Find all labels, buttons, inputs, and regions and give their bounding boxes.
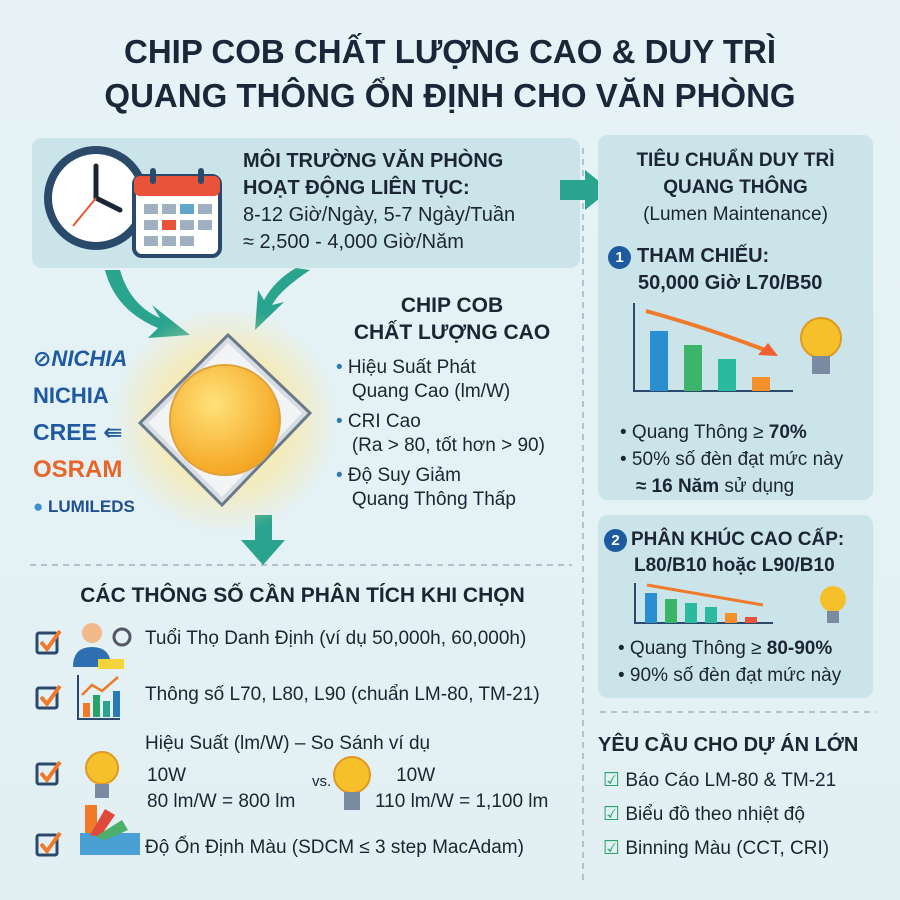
heading: (Lumen Maintenance) (643, 204, 828, 225)
list: parameters: Độ Ổn Định Màu (SDCM ≤ 3 step MacAdam) (145, 837, 524, 858)
list: chip features: (Ra > 80, tốt hơn > 90) (352, 435, 545, 456)
list: parameters: 110 lm/W = 1,100 lm (375, 791, 548, 812)
panel: premium segment: L80/B10 hoặc L90/B10 (634, 555, 835, 576)
person icon (82, 623, 102, 643)
icon: clock and calendar (44, 146, 222, 258)
bulb icon (86, 752, 118, 784)
list: chip features: • Hiệu Suất Phát (336, 357, 476, 378)
chart 1 (633, 303, 842, 392)
brand logos: ● LUMILEDS (33, 497, 135, 516)
heading: QUANG THÔNG (663, 177, 808, 198)
list: requirements: ☑ Biểu đồ theo nhiệt độ (603, 804, 805, 825)
list: requirements (603, 770, 836, 859)
icons: checkboxes (36, 623, 140, 856)
text: office hours: ≈ 2,500 - 4,000 Giờ/Năm (243, 231, 464, 253)
list: parameters: 10W (396, 765, 435, 786)
title (104, 33, 796, 114)
list: parameters: 80 lm/W = 800 lm (147, 791, 295, 812)
list: requirements: ☑ Binning Màu (CCT, CRI) (603, 838, 829, 859)
heading: TIÊU CHUẨN DUY TRÌ (636, 150, 835, 171)
list: parameters: vs. (312, 773, 331, 790)
text: office hours (243, 148, 515, 253)
subheading 1: 1 (615, 249, 624, 266)
panel: lumen maintenance (598, 135, 873, 500)
text: office hours: HOẠT ĐỘNG LIÊN TỤC: (243, 177, 470, 199)
title: CHIP COB CHẤT LƯỢNG CAO & DUY TRÌ (124, 33, 776, 70)
icon: COB chip (116, 314, 332, 526)
panel: premium segment (598, 515, 873, 698)
panel: premium segment: 2 (611, 532, 620, 549)
list: chip features: • CRI Cao (336, 411, 421, 432)
heading: chip cob (354, 294, 550, 344)
subheading 1: 50,000 Giờ L70/B50 (638, 272, 822, 294)
list: parameters (36, 623, 548, 858)
brand logos: ⊘NICHIA (33, 346, 127, 371)
heading (636, 148, 835, 225)
text: office hours: 8-12 Giờ/Ngày, 5-7 Ngày/Tuần (243, 204, 515, 226)
panel: premium segment: PHÂN KHÚC CAO CẤP: (631, 529, 844, 550)
title: QUANG THÔNG ỔN ĐỊNH CHO VĂN PHÒNG (104, 77, 796, 114)
bullets 1 (620, 422, 844, 497)
list: parameters: Hiệu Suất (lm/W) – So Sánh ví dụ (145, 733, 430, 754)
brand logos: NICHIA (33, 383, 109, 408)
list: chip features: Quang Thông Thấp (352, 489, 516, 510)
text rows: Tuổi Thọ Danh Định (ví dụ 50,000h, 60,000h) (145, 628, 526, 649)
heading: large project requirements: YÊU CẦU CHO DỰ ÁN LỚN (598, 734, 858, 756)
panel: premium segment: • 90% số đèn đạt mức này (618, 665, 841, 686)
text: office hours: MÔI TRƯỜNG VĂN PHÒNG (243, 150, 503, 172)
brand logos: CREE ⇚ (33, 419, 123, 445)
panel: office environment (32, 138, 580, 268)
bullets 1: • Quang Thông ≥ 70% (620, 422, 807, 443)
heading: parameters: CÁC THÔNG SỐ CẦN PHÂN TÍCH KHI CHỌN (80, 584, 525, 607)
chart icon (78, 675, 120, 719)
list: parameters: Thông số L70, L80, L90 (chuẩn LM-80, TM-21) (145, 684, 540, 705)
panel: premium segment: • Quang Thông ≥ 80-90% (618, 638, 832, 659)
heading: chip cob: CHIP COB (401, 294, 503, 317)
bullets 1: ≈ 16 Năm sử dụng (636, 476, 794, 497)
list: chip features (336, 357, 545, 510)
subheading 1 (608, 244, 822, 294)
swatch icon (80, 833, 144, 855)
bullets 1: • 50% số đèn đạt mức này (620, 449, 843, 470)
list: chip features: Quang Cao (lm/W) (352, 381, 510, 402)
heading: chip cob: CHẤT LƯỢNG CAO (354, 321, 550, 344)
subheading 1: THAM CHIẾU: (637, 245, 769, 267)
arrows: teal flow (105, 170, 598, 565)
chart 2 (634, 583, 846, 624)
brand logos: OSRAM (33, 456, 122, 483)
list: requirements: ☑ Báo Cáo LM-80 & TM-21 (603, 770, 836, 791)
list: chip features: • Độ Suy Giảm (336, 465, 461, 486)
list: parameters: 10W (147, 765, 186, 786)
brand logos (33, 346, 135, 516)
